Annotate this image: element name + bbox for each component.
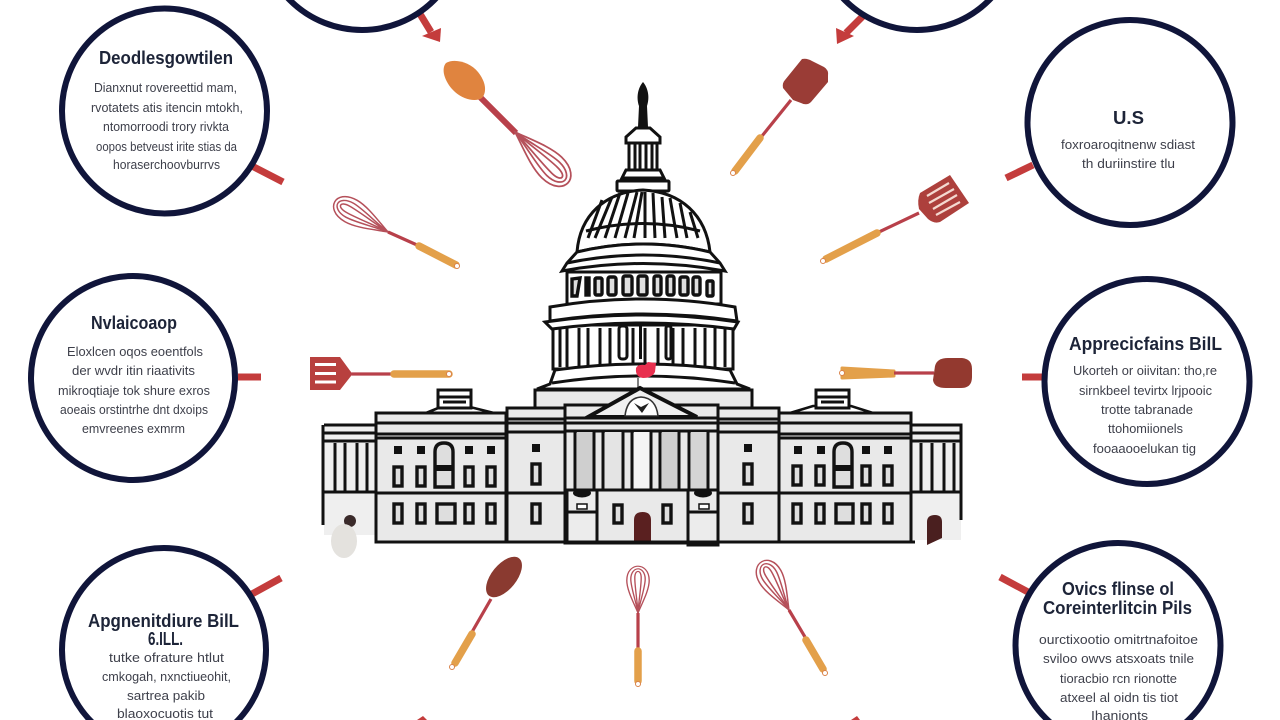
body text: ttohomiionels (1108, 422, 1183, 436)
body text: atxeel al oidn tis tiot (1060, 691, 1179, 705)
body text (1039, 633, 1198, 720)
door (634, 512, 651, 542)
columns (575, 431, 708, 490)
right flank block (718, 408, 779, 542)
body text: ntomorroodi trory rivkta (103, 120, 229, 134)
body text: cmkogah, nxnctiueohit, (102, 670, 231, 684)
icon: spoon, bottom left (450, 550, 529, 670)
heading: 6.ILL. (148, 629, 183, 649)
icon: spoon and whisk, top left (444, 61, 578, 193)
body text: sartrea pakib (127, 689, 205, 703)
body text: oopos betveust irite stias da (96, 140, 237, 154)
icon: whisk, bottom centre (627, 566, 649, 686)
icon: spatula, left (310, 357, 452, 390)
heading: Coreinterlitcin Pils (1043, 598, 1192, 618)
body text: fooaaooelukan tig (1093, 442, 1196, 456)
body text: tutke ofrature htlut (109, 651, 225, 665)
heading: Apgnenitdiure BilL (88, 611, 239, 631)
body text: Dianxnut rovereettid mam, (94, 81, 237, 95)
central portico (565, 388, 718, 545)
heading (1043, 579, 1192, 618)
body text: tioracbio rcn rionotte (1060, 672, 1177, 686)
left flank block (507, 408, 565, 542)
body text: ourctixootio omitrtnafoitoe (1039, 633, 1198, 647)
body text (1061, 138, 1196, 171)
body text: sviloo owvs atsxoats tnile (1043, 652, 1194, 666)
dome base (537, 364, 750, 389)
body text: th duriinstire tlu (1082, 157, 1175, 171)
flag (636, 362, 656, 390)
body text: horaserchoovburrvs (113, 158, 220, 172)
icon: spatula, top right (730, 59, 828, 176)
body text: emvreenes exmrm (82, 422, 185, 436)
panel: bottom-right circle (1016, 543, 1220, 720)
heading: Deodlesgowtilen (99, 48, 233, 68)
body text (58, 345, 210, 436)
body text: foxroaroqitnenw sdiast (1061, 138, 1196, 152)
finial (638, 82, 648, 127)
right wing (779, 390, 911, 542)
body text (91, 81, 243, 172)
body text: sirnkbeel tevirtx lrjpooic (1079, 384, 1212, 398)
icon: whisk, bottom right (751, 556, 828, 676)
left wing (376, 390, 506, 542)
body text (1073, 364, 1217, 456)
body text: Ukorteh or oiivitan: tho,re (1073, 364, 1217, 378)
body text: Eloxlcen oqos eoentfols (67, 345, 203, 359)
body text: aoeais orstintrhe dnt dxoips (60, 403, 208, 417)
icon: slotted spatula, right (820, 175, 969, 264)
pediment (588, 388, 697, 417)
panel: top centre-left circle (260, 0, 464, 30)
body text: rvotatets atis itencin mtokh, (91, 101, 243, 115)
panel: top-right circle (1028, 20, 1232, 225)
right end wing (911, 425, 961, 545)
panel: middle-right circle (1044, 279, 1250, 484)
dome shell (577, 190, 710, 252)
icon: spoon, right (840, 358, 972, 388)
heading: U.S (1113, 108, 1144, 128)
connector stubs and arrows (238, 14, 1042, 720)
heading: Nvlaicoaop (91, 313, 177, 333)
body text: der wvdr itin riaativits (72, 364, 195, 378)
lower porch (567, 488, 718, 545)
heading (88, 611, 239, 649)
icon: whisk, upper left (329, 191, 460, 268)
heading: Ovics flinse ol (1062, 579, 1174, 599)
panel: bottom-left circle (62, 548, 266, 720)
heading: Apprecicfains BilL (1069, 334, 1222, 354)
body text: mikroqtiaje tok shure exros (58, 384, 210, 398)
colonnade (545, 299, 738, 369)
panel: middle-left circle (31, 276, 235, 480)
drum with windows (562, 244, 725, 304)
capitol dome (535, 82, 752, 410)
panel: top centre-right circle (815, 0, 1019, 30)
body text: trotte tabranade (1101, 403, 1193, 417)
lantern (617, 128, 669, 191)
illustration: capitol building (323, 82, 961, 558)
left end wing (323, 425, 376, 558)
panel: top-left circle (62, 8, 267, 214)
body text (102, 651, 231, 720)
